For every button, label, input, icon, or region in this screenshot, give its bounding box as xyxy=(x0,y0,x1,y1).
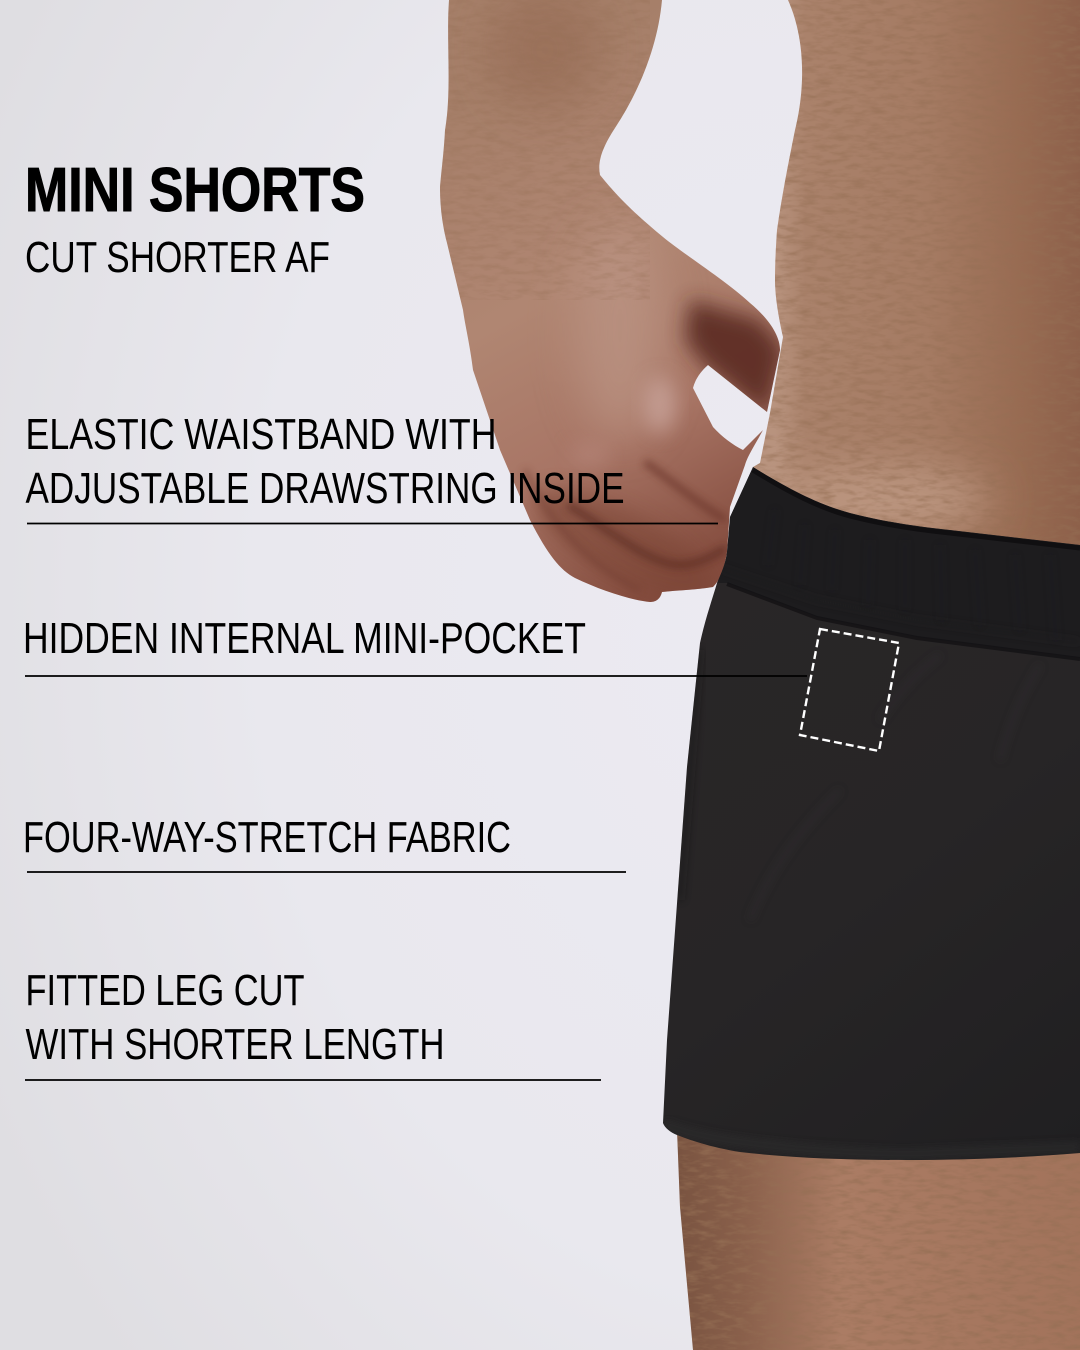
hem xyxy=(663,1124,676,1135)
callout: pocket: HIDDEN INTERNAL MINI-POCKET xyxy=(23,614,586,663)
forearm and hand xyxy=(430,0,790,620)
knuckle highlights xyxy=(644,377,676,433)
callout: leg cut: WITH SHORTER LENGTH xyxy=(26,1020,444,1069)
photo: model torso, hand and mini shorts xyxy=(430,0,1080,1350)
thumb shadow xyxy=(685,300,785,415)
waistband gathers xyxy=(768,510,1056,640)
callout: leg cut xyxy=(25,966,601,1080)
callout: waistband: ELASTIC WAISTBAND WITH xyxy=(26,410,496,459)
thigh xyxy=(670,1130,1080,1350)
finger creases xyxy=(645,462,726,520)
title: MINI SHORTS xyxy=(25,156,365,225)
subtitle: CUT SHORTER AF xyxy=(25,233,330,282)
fabric folds xyxy=(680,650,700,900)
torso xyxy=(750,0,1080,580)
callout: waistband xyxy=(26,410,718,524)
dashed mini-pocket marker xyxy=(800,629,899,751)
shorts xyxy=(655,460,1080,1165)
callout: leg cut: FITTED LEG CUT xyxy=(26,966,304,1015)
waistband xyxy=(717,467,1080,658)
callout: fabric: FOUR-WAY-STRETCH FABRIC xyxy=(23,813,511,862)
callout: waistband: ADJUSTABLE DRAWSTRING INSIDE xyxy=(26,464,624,513)
